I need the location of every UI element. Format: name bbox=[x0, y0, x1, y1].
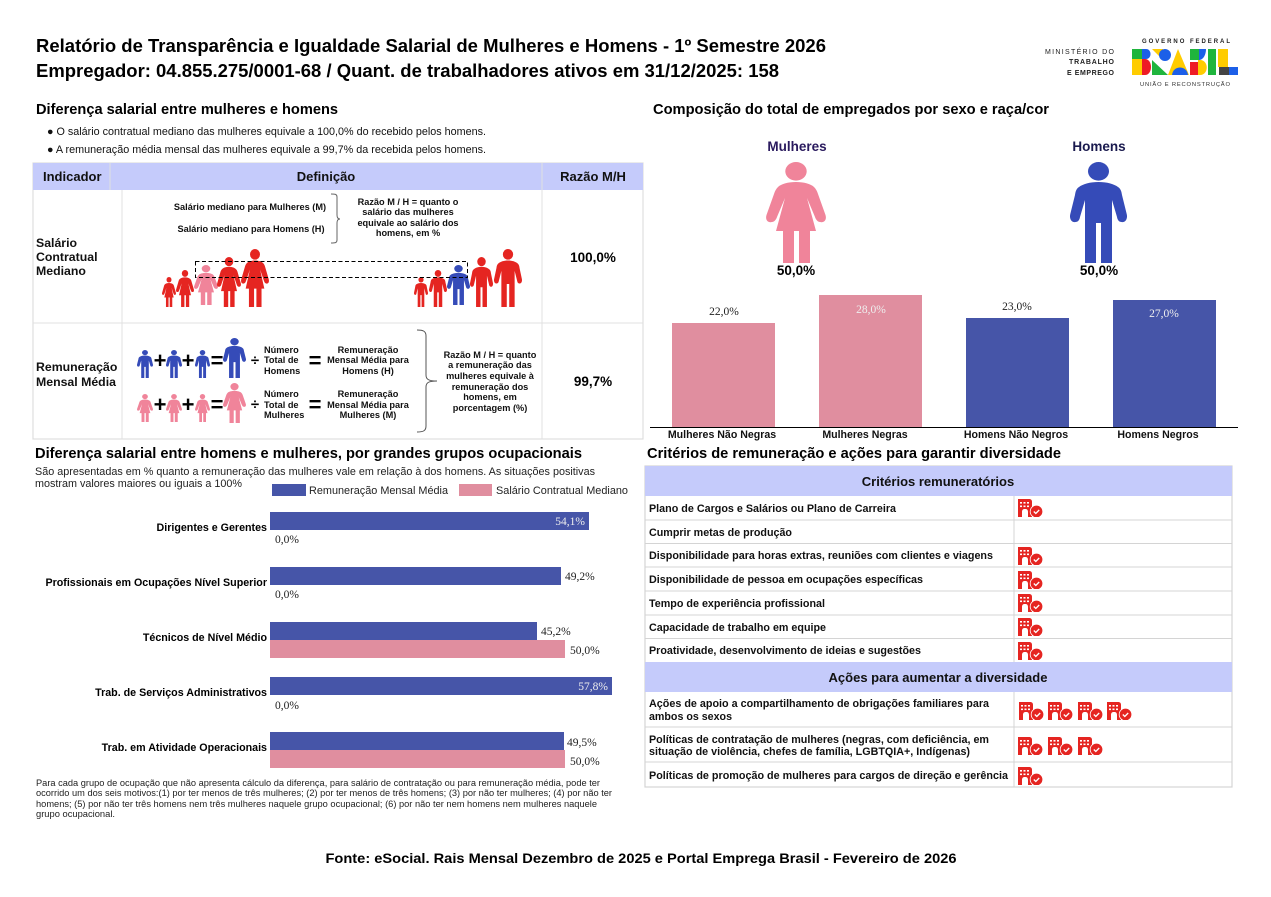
formula operators: = bbox=[309, 392, 321, 417]
bar chart: composição: 28,0% bbox=[856, 304, 886, 316]
text block: footnote: homens; (5) por não ter três homens nem três mulheres naquele grupo ocupacional; (6) por não ter nem homens nem mulheres naquele bbox=[36, 799, 597, 809]
logo: Governo Federal Brasil bbox=[1132, 39, 1238, 88]
legend: Remuneração Mensal Média bbox=[309, 485, 448, 497]
logo: Ministério do Trabalho e Emprego: E EMPREGO bbox=[1067, 70, 1115, 77]
bar chart: composição: Mulheres Não Negras bbox=[668, 429, 776, 441]
formula operators: + bbox=[182, 392, 194, 417]
criteria rows: Políticas de contratação de mulheres (negras, com deficiência, em bbox=[649, 734, 989, 746]
bar chart: composição: 22,0% bbox=[709, 306, 739, 318]
bar chart: grupos ocupacionais: 0,0% bbox=[275, 589, 299, 601]
formula texts: Mulheres bbox=[264, 410, 304, 420]
dashed median box bbox=[196, 262, 468, 278]
value: razão salário contratual: 100,0% bbox=[570, 250, 616, 265]
logo: Governo Federal Brasil: GOVERNO FEDERAL bbox=[1142, 39, 1230, 45]
title: Relatório de Transparência e Igualdade Salarial de Mulheres e Homens - 1º Semestre 2026 bbox=[36, 36, 826, 56]
icons: criteria checks bbox=[1018, 499, 1132, 786]
formula texts: Total de bbox=[264, 355, 299, 365]
criteria rows: Políticas de promoção de mulheres para cargos de direção e gerência bbox=[649, 770, 1009, 782]
formula texts: Mensal Média para bbox=[327, 400, 410, 410]
bar chart: grupos ocupacionais: 50,0% bbox=[570, 645, 600, 657]
section header: ações: Ações para aumentar a diversidade bbox=[829, 670, 1047, 685]
criteria rows: ambos os sexos bbox=[649, 711, 732, 723]
formula texts: Remuneração bbox=[338, 389, 399, 399]
bar chart: grupos ocupacionais: 0,0% bbox=[275, 700, 299, 712]
formula: homens bbox=[137, 338, 246, 378]
bar chart: composição: Homens Negros bbox=[1117, 429, 1199, 441]
criteria rows: situação de violência, chefes de família, LGBTQIA+, Indígenas) bbox=[649, 746, 970, 758]
text block: bullets: ● O salário contratual mediano das mulheres equivale a 100,0% do recebido pelos homens. bbox=[47, 126, 486, 138]
icons: men salary line bbox=[414, 249, 522, 307]
bar chart: grupos ocupacionais: 49,5% bbox=[567, 737, 597, 749]
legend: Salário Contratual Mediano bbox=[496, 485, 628, 497]
formula operators: = bbox=[211, 392, 223, 417]
figure: mulheres bbox=[766, 139, 827, 278]
table headers: Indicador bbox=[43, 169, 102, 184]
formula texts: Mulheres (M) bbox=[340, 410, 396, 420]
title bbox=[36, 36, 826, 81]
definition: salário mediano: Salário mediano para Mulheres (M) bbox=[174, 202, 326, 212]
footer source: Fonte: eSocial. Rais Mensal Dezembro de 2025 e Portal Emprega Brasil - Fevereiro de 2026 bbox=[326, 850, 957, 866]
text block: footnote: ocorrido um dos seis motivos:(1) por ter menos de três mulheres; (2) por ter menos de três homens; (3) por não ter mulheres; (4) por não ter bbox=[36, 788, 612, 798]
bar chart: grupos ocupacionais: 49,2% bbox=[565, 571, 595, 583]
bar chart: grupos ocupacionais bbox=[45, 512, 612, 768]
formula texts: remuneração dos bbox=[452, 382, 528, 392]
figure: mulheres: 50,0% bbox=[777, 263, 815, 278]
formula texts: Total de bbox=[264, 400, 299, 410]
formula operators: + bbox=[154, 392, 166, 417]
figure: homens: 50,0% bbox=[1080, 263, 1118, 278]
text block: chart description: mostram valores maiores ou iguais a 100% bbox=[35, 478, 242, 490]
logo: Governo Federal Brasil: UNIÃO E RECONSTRUÇÃO bbox=[1140, 81, 1230, 88]
formula texts: mulheres equivale à bbox=[446, 371, 535, 381]
text block: chart description: São apresentadas em % quanto a remuneração das mulheres vale em relação à dos homens. As situações positivas bbox=[35, 466, 596, 478]
value: razão remuneração: 99,7% bbox=[574, 374, 612, 389]
icons: women salary line bbox=[162, 249, 269, 307]
definition: salário mediano: homens, em % bbox=[376, 228, 440, 238]
logo: Ministério do Trabalho e Emprego: TRABALHO bbox=[1069, 59, 1115, 66]
definition: salário mediano: salário das mulheres bbox=[362, 207, 454, 217]
heading: critérios: Critérios de remuneração e ações para garantir diversidade bbox=[647, 445, 1061, 462]
value labels: 54,1% bbox=[555, 516, 585, 528]
panel: criteria table bbox=[645, 466, 1232, 787]
bar chart: grupos ocupacionais: 57,8% bbox=[578, 681, 608, 693]
formula texts: homens, em bbox=[463, 392, 517, 402]
legend bbox=[272, 484, 628, 497]
table headers bbox=[43, 169, 626, 184]
logo: Ministério do Trabalho e Emprego: MINISTÉRIO DO bbox=[1045, 47, 1115, 56]
formula operators: + bbox=[154, 348, 166, 373]
formula operators: + bbox=[182, 348, 194, 373]
figure: mulheres: Mulheres bbox=[767, 139, 827, 154]
table headers: Razão M/H bbox=[560, 169, 626, 184]
criteria rows: Ações de apoio a compartilhamento de obrigações familiares para bbox=[649, 698, 990, 710]
formula operators: ÷ bbox=[251, 396, 259, 413]
row: salário contratual mediano label: Contratual bbox=[36, 250, 98, 264]
brace: salário bbox=[331, 194, 340, 243]
formula texts: Razão M / H = quanto bbox=[444, 350, 537, 360]
criteria rows: Capacidade de trabalho em equipe bbox=[649, 622, 826, 634]
category labels bbox=[45, 522, 267, 754]
row: salário contratual mediano label: Mediano bbox=[36, 264, 86, 278]
criteria rows bbox=[649, 503, 1009, 782]
definition: salário mediano: Razão M / H = quanto o bbox=[358, 197, 459, 207]
row: salário contratual mediano label: Salário bbox=[36, 236, 77, 250]
row: remuneração mensal média label bbox=[36, 360, 118, 389]
bar chart: grupos ocupacionais: 50,0% bbox=[570, 756, 600, 768]
formula operators: = bbox=[309, 348, 321, 373]
text block: bullets: ● A remuneração média mensal das mulheres equivale a 99,7% da recebida pelos homens. bbox=[47, 144, 486, 156]
heading: diferença salarial: Diferença salarial entre mulheres e homens bbox=[36, 101, 338, 118]
section header: critérios remuneratórios: Critérios remuneratórios bbox=[862, 474, 1014, 489]
formula texts: Remuneração bbox=[338, 345, 399, 355]
formula texts: Número bbox=[264, 389, 299, 399]
bar chart: grupos ocupacionais: 45,2% bbox=[541, 626, 571, 638]
bar chart: composição bbox=[650, 295, 1238, 441]
category labels: Profissionais em Ocupações Nível Superior bbox=[45, 577, 267, 589]
brace: remuneração bbox=[417, 330, 437, 432]
bar chart: grupos ocupacionais: 0,0% bbox=[275, 534, 299, 546]
formula texts: a remuneração das bbox=[448, 360, 532, 370]
text block: footnote: Para cada grupo de ocupação que não apresenta cálculo da diferença, para salário de contratação ou para remuneração média, pode ter bbox=[36, 778, 600, 788]
formula texts bbox=[264, 345, 537, 420]
criteria rows: Proatividade, desenvolvimento de ideias e sugestões bbox=[649, 645, 921, 657]
table headers: Definição bbox=[297, 169, 355, 184]
bar chart: composição: 27,0% bbox=[1149, 308, 1179, 320]
figure: homens bbox=[1070, 139, 1127, 278]
formula texts: Número bbox=[264, 345, 299, 355]
criteria rows: Plano de Cargos e Salários ou Plano de Carreira bbox=[649, 503, 897, 515]
text block: footnote bbox=[36, 778, 612, 819]
figure: homens: Homens bbox=[1072, 139, 1126, 154]
logo: Ministério do Trabalho e Emprego bbox=[1045, 47, 1115, 77]
panel: indicator table bbox=[33, 163, 643, 439]
bar chart: composição: Homens Não Negros bbox=[964, 429, 1068, 441]
bars bbox=[270, 512, 612, 750]
formula operators: ÷ bbox=[251, 352, 259, 369]
formula: mulheres bbox=[137, 383, 246, 423]
category labels: Técnicos de Nível Médio bbox=[143, 632, 267, 644]
criteria rows: Disponibilidade de pessoa em ocupações específicas bbox=[649, 574, 923, 586]
bar chart: composição: 23,0% bbox=[1002, 301, 1032, 313]
definition: salário mediano: equivale ao salário dos bbox=[357, 218, 459, 228]
category labels: Trab. em Atividade Operacionais bbox=[102, 742, 267, 754]
definition: salário mediano bbox=[174, 197, 459, 238]
row: remuneração mensal média label: Mensal Média bbox=[36, 375, 116, 389]
criteria rows: Cumprir metas de produção bbox=[649, 527, 792, 539]
formula texts: Mensal Média para bbox=[327, 355, 410, 365]
text block: chart description bbox=[35, 466, 596, 490]
text block: footnote: grupo ocupacional. bbox=[36, 809, 115, 819]
category labels: Dirigentes e Gerentes bbox=[157, 522, 267, 534]
criteria rows: Disponibilidade para horas extras, reuniões com clientes e viagens bbox=[649, 550, 993, 562]
formula texts: porcentagem (%) bbox=[453, 403, 527, 413]
bar chart: composição: Mulheres Negras bbox=[822, 429, 908, 441]
formula operators bbox=[154, 348, 321, 417]
row: remuneração mensal média label: Remuneração bbox=[36, 360, 118, 374]
formula operators: = bbox=[211, 348, 223, 373]
heading: composição: Composição do total de empregados por sexo e raça/cor bbox=[653, 101, 1049, 118]
title: Empregador: 04.855.275/0001-68 / Quant. de trabalhadores ativos em 31/12/2025: 158 bbox=[36, 61, 779, 81]
criteria rows: Tempo de experiência profissional bbox=[649, 598, 825, 610]
row: salário contratual mediano label bbox=[36, 236, 98, 278]
heading: grupos ocupacionais: Diferença salarial entre homens e mulheres, por grandes grupos ocupacionais bbox=[35, 445, 582, 462]
definition: salário mediano: Salário mediano para Homens (H) bbox=[177, 224, 325, 234]
formula texts: Homens bbox=[264, 366, 300, 376]
formula texts: Homens (H) bbox=[342, 366, 394, 376]
category labels: Trab. de Serviços Administrativos bbox=[95, 687, 267, 699]
text block: bullets bbox=[47, 126, 486, 156]
